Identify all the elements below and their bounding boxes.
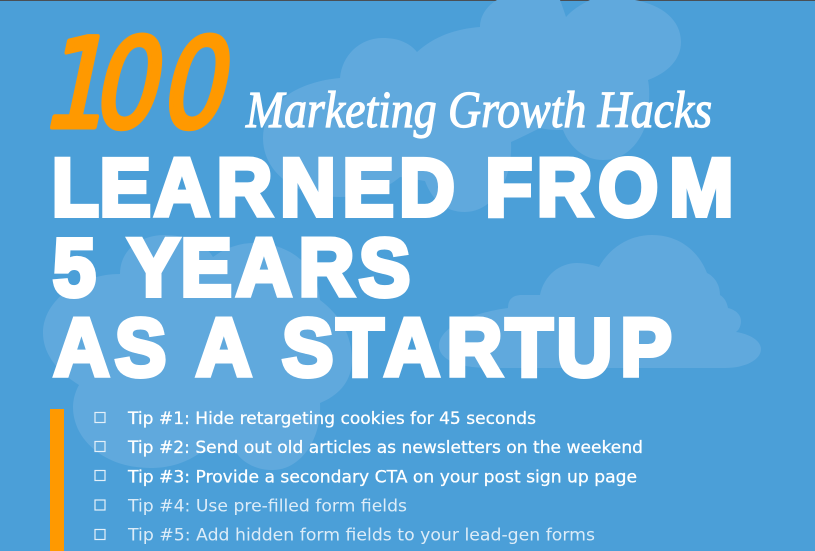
headline line 3: AS A STARTUP [54, 301, 672, 393]
top edge line [0, 0, 815, 1]
tip 3: Tip #3: Provide a secondary CTA on your post sign up page [127, 468, 637, 488]
script subtitle: Marketing Growth Hacks [245, 82, 712, 139]
tip 1: Tip #1: Hide retargeting cookies for 45 seconds [127, 409, 536, 429]
tips list [95, 409, 643, 546]
number 100: 100 [33, 13, 247, 157]
tip 4: Tip #4: Use pre-filled form fields [127, 496, 407, 516]
tip 5: Tip #5: Add hidden form fields to your lead-gen forms [127, 526, 595, 546]
headline line 2: 5 YEARS [53, 221, 410, 313]
headline line 1: LEARNED FROM [52, 141, 733, 233]
tip 2: Tip #2: Send out old articles as newsletters on the weekend [127, 438, 643, 458]
background clouds [43, 0, 761, 470]
headline [52, 141, 733, 393]
orange accent bar [50, 409, 64, 551]
